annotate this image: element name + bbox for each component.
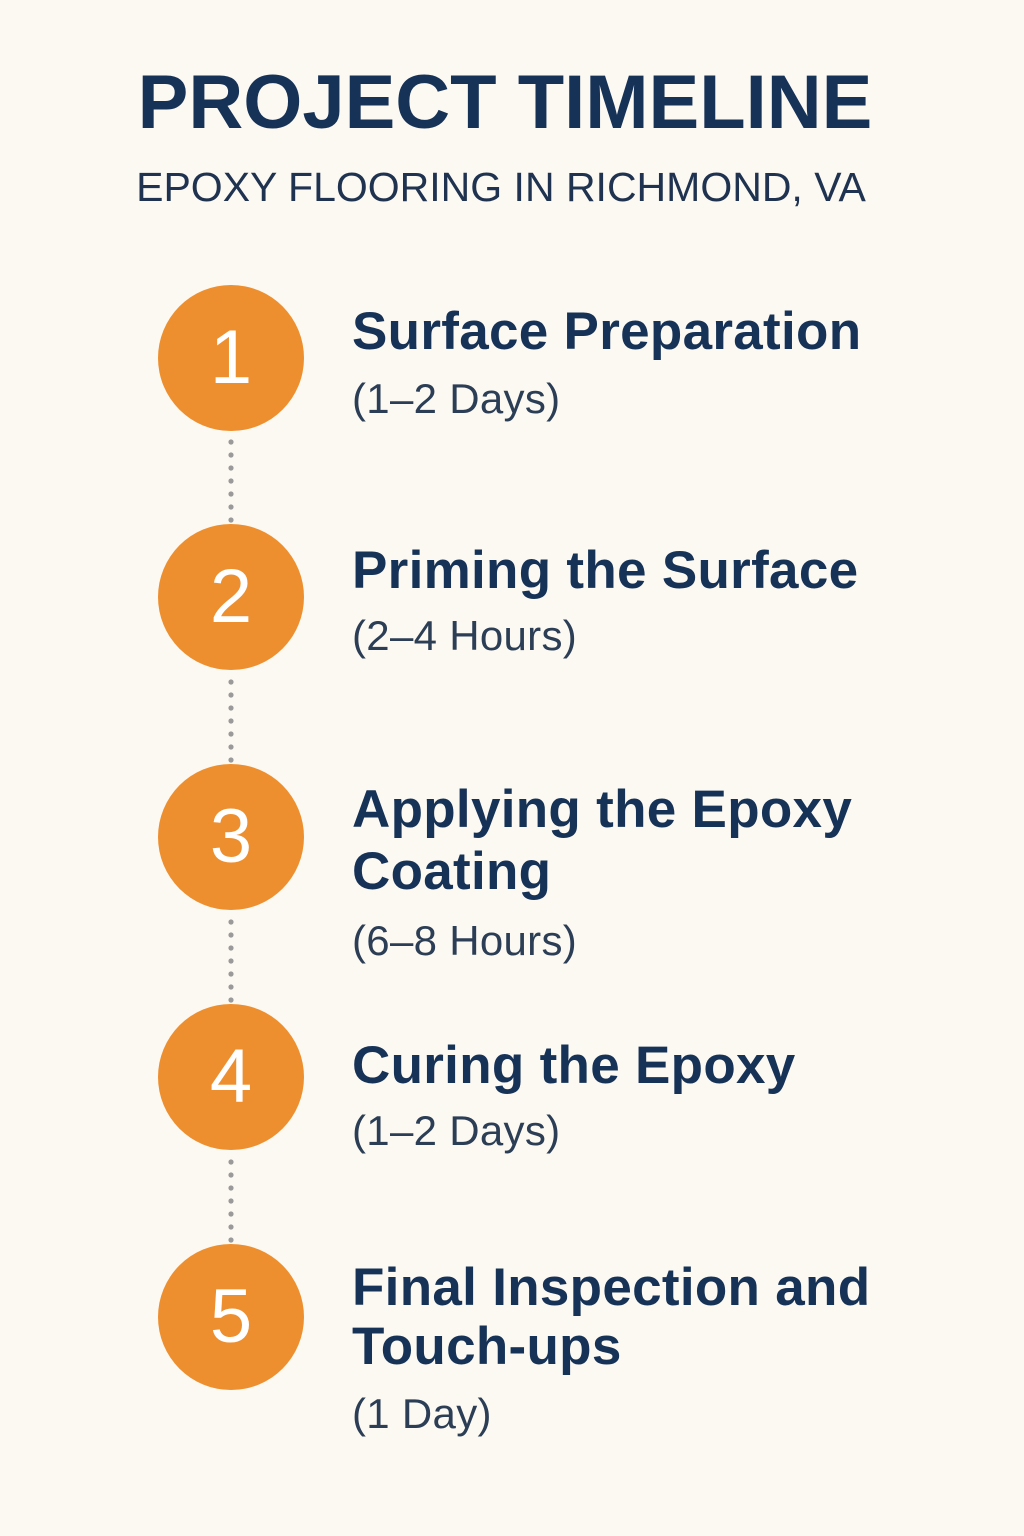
step 5 circle	[158, 1244, 304, 1390]
step 4 circle: 4	[210, 1034, 252, 1119]
step 3 heading	[352, 780, 852, 901]
step 2 circle	[158, 524, 304, 670]
subtitle: EPOXY FLOORING IN RICHMOND, VA	[136, 164, 866, 210]
step 5 heading: Final Inspection and	[352, 1258, 870, 1317]
step 4 circle	[158, 1004, 304, 1150]
step 5 heading	[352, 1258, 870, 1376]
step 3 heading: Coating	[352, 842, 551, 901]
step 1 duration: (1–2 Days)	[352, 375, 560, 422]
step 1 circle	[158, 285, 304, 431]
step 1 circle: 1	[210, 315, 252, 400]
step 2 duration: (2–4 Hours)	[352, 612, 577, 659]
step 5 duration: (1 Day)	[352, 1390, 492, 1437]
step 2 circle: 2	[210, 554, 252, 639]
title: PROJECT TIMELINE	[138, 60, 872, 145]
step 4 duration: (1–2 Days)	[352, 1107, 560, 1154]
step 5 heading: Touch-ups	[352, 1317, 622, 1376]
step 3 duration: (6–8 Hours)	[352, 917, 577, 964]
step 5 circle: 5	[210, 1274, 252, 1359]
step 4 heading: Curing the Epoxy	[352, 1036, 796, 1095]
step 3 circle	[158, 764, 304, 910]
step 1 heading: Surface Preparation	[352, 302, 861, 361]
step 3 heading: Applying the Epoxy	[352, 780, 852, 839]
step 2 heading: Priming the Surface	[352, 541, 858, 600]
step 3 circle: 3	[210, 794, 252, 879]
